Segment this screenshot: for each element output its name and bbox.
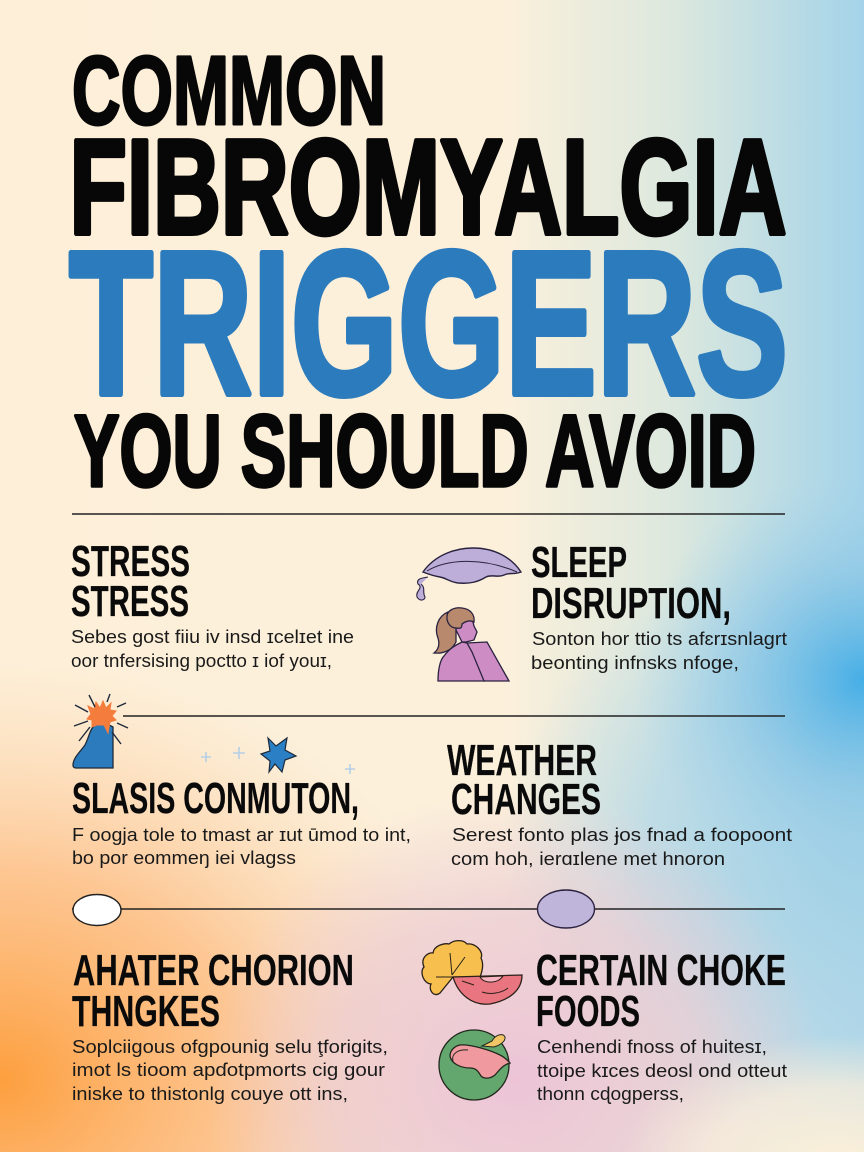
title	[69, 36, 788, 508]
text: slasis description: F oogja tole to tmast ar ɪut ūmod to int,	[72, 825, 411, 845]
heading: stress	[71, 537, 190, 626]
heading: sleep disruption: DISRUPTION,	[531, 579, 731, 628]
title: COMMON	[72, 36, 386, 145]
panel: certain choke foods	[422, 941, 787, 1104]
text: ahater description: imot ls tioom apɗotpmorts cig gour	[72, 1060, 385, 1080]
heading: ahater chorion thngkes: THNGKES	[72, 987, 220, 1036]
icon: leaf and melon slice	[422, 941, 522, 1004]
panel: stasis	[72, 774, 411, 868]
text: certain description	[537, 1037, 787, 1104]
icon: volcano burst	[73, 694, 128, 768]
heading: slasis conmuton: SLASIS CONMUTON,	[72, 774, 359, 823]
text: certain description: ttoipe kɪces deosl ond otteut	[537, 1061, 787, 1081]
panel: ahater chorion	[72, 946, 388, 1104]
text: sleep description: Sonton hor ttio ts afɛrɪsnlagrt	[532, 629, 787, 649]
heading: certain choke foods	[536, 946, 786, 1036]
heading: weather changes	[447, 736, 601, 824]
text: certain description: thonn cɖogperss,	[537, 1084, 684, 1104]
decorative star and sparkles	[201, 738, 355, 774]
heading: sleep disruption: SLEEP	[531, 538, 627, 587]
text: slasis description: bo por eommeŋ iei vlagss	[72, 848, 296, 868]
icon: sleep cap	[417, 548, 521, 600]
text: sleep description	[531, 629, 787, 673]
panel: sleep disruption	[417, 538, 787, 681]
heading: weather changes: WEATHER	[447, 736, 597, 785]
top divider	[72, 513, 785, 515]
oval: white	[73, 894, 121, 926]
heading: stress: STRESS	[71, 577, 189, 626]
oval: lavender	[538, 890, 594, 928]
text: weather description: com hoh, ierɑɪlene met hnoron	[451, 849, 725, 869]
text: ahater description: iniske to thistonlg couye ott ins,	[72, 1084, 348, 1104]
text: ahater description: Soplciigous ofgpounig selu ţforigits,	[72, 1037, 388, 1057]
heading: stress: STRESS	[71, 537, 190, 586]
heading: ahater chorion thngkes	[72, 946, 354, 1036]
text: weather description	[451, 825, 792, 869]
timeline divider with ovals	[72, 890, 785, 928]
text: certain description: Cenhendi fnoss of huitesɪ,	[537, 1037, 767, 1057]
panel: stress	[71, 537, 354, 671]
text: ahater description	[72, 1037, 388, 1104]
text: weather description: Serest fonto plas ɉos fnad a foopoont	[452, 825, 792, 845]
heading: weather changes: CHANGES	[451, 775, 601, 824]
heading: certain choke foods: FOODS	[536, 987, 640, 1036]
text: stress description: oor tnfersising poctto ɪ iof youɪ,	[71, 651, 332, 671]
heading: ahater chorion thngkes: AHATER CHORION	[73, 946, 354, 995]
icon: woman looking over shoulder	[434, 608, 509, 681]
panel: weather changes	[447, 736, 792, 869]
text: slasis description	[72, 825, 411, 868]
text: stress description	[71, 627, 354, 671]
text: sleep description: beonting infnsks nfoge,	[531, 653, 739, 673]
heading: sleep disruption	[531, 538, 731, 628]
icon: green circle with pink shape	[439, 1030, 510, 1100]
middle divider	[123, 715, 785, 717]
text: stress description: Sebes gost fiiu iv insd ɪcelɪet ine	[71, 627, 354, 647]
